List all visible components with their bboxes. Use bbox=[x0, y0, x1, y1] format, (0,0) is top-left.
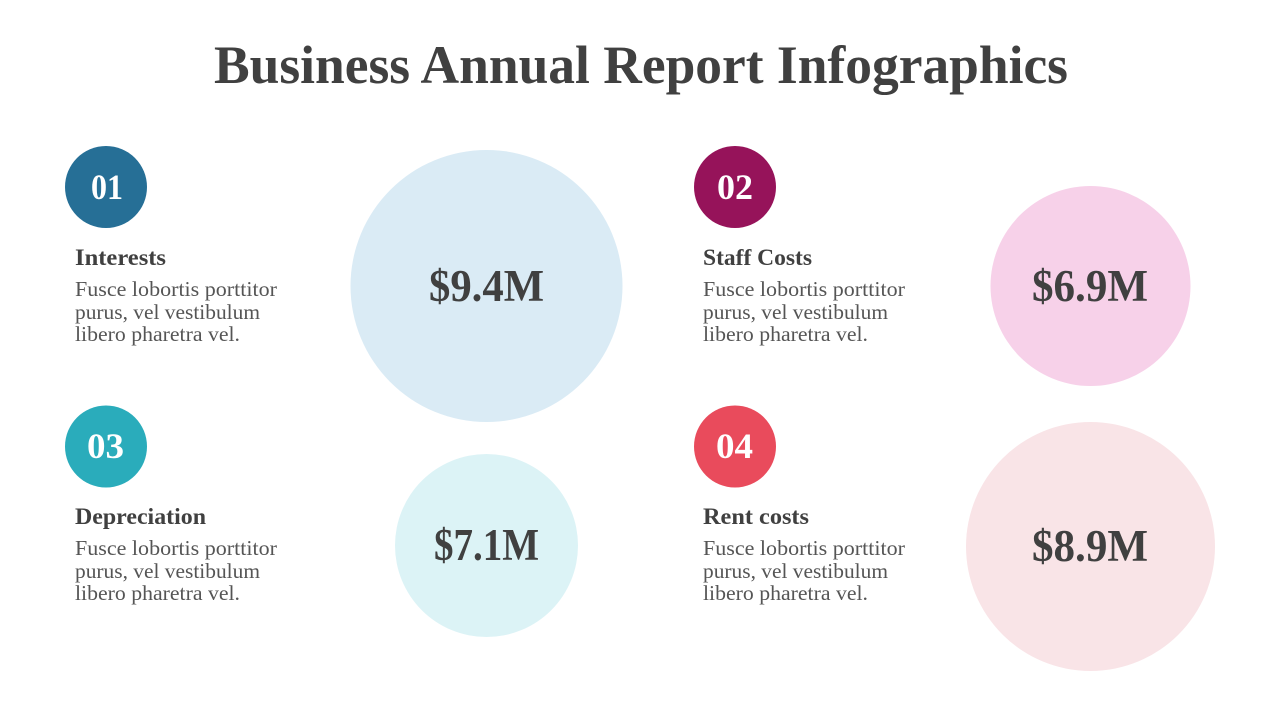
text block: interests description: Fusce lobortis porttitor bbox=[75, 277, 277, 301]
text block: staff costs description: libero pharetra vel. bbox=[703, 322, 868, 346]
heading: Interests: Interests bbox=[75, 245, 166, 270]
text block: staff costs description: Fusce lobortis porttitor bbox=[703, 277, 905, 301]
icon: number badge 02: 02 bbox=[717, 167, 753, 207]
text block: rent costs description: purus, vel vestibulum bbox=[703, 559, 888, 583]
heading: Depreciation: Depreciation bbox=[75, 504, 206, 529]
title: Business Annual Report Infographics bbox=[214, 35, 1068, 95]
icon: number badge 02 bbox=[694, 146, 776, 228]
value bubble: $9.4M bbox=[350, 150, 622, 422]
text block: staff costs description bbox=[703, 277, 905, 346]
icon: number badge 01 bbox=[65, 146, 147, 228]
text block: depreciation description: libero pharetra vel. bbox=[75, 581, 240, 605]
panel: staff costs bbox=[694, 146, 1190, 386]
heading: Rent costs: Rent costs bbox=[703, 504, 809, 529]
value bubble: $8.9M bbox=[966, 422, 1215, 671]
text block: interests description bbox=[75, 277, 277, 346]
panel: interests bbox=[65, 146, 622, 422]
heading: Staff Costs: Staff Costs bbox=[703, 245, 812, 270]
text block: depreciation description bbox=[75, 536, 277, 605]
text block: interests description: purus, vel vestibulum bbox=[75, 300, 260, 324]
text block: interests description: libero pharetra vel. bbox=[75, 322, 240, 346]
value bubble: $6.9M bbox=[990, 186, 1190, 386]
icon: number badge 03: 03 bbox=[87, 426, 124, 466]
text block: staff costs description: purus, vel vestibulum bbox=[703, 300, 888, 324]
text block: rent costs description: libero pharetra vel. bbox=[703, 581, 868, 605]
text block: depreciation description: Fusce lobortis porttitor bbox=[75, 536, 277, 560]
value bubble: $8.9M: $8.9M bbox=[1032, 521, 1148, 571]
text block: rent costs description bbox=[703, 536, 905, 605]
panel: depreciation bbox=[65, 406, 578, 637]
icon: number badge 04 bbox=[694, 406, 776, 488]
value bubble: $6.9M: $6.9M bbox=[1032, 261, 1148, 311]
text block: rent costs description: Fusce lobortis porttitor bbox=[703, 536, 905, 560]
value bubble: $9.4M: $9.4M bbox=[429, 261, 544, 311]
value bubble: $7.1M bbox=[395, 454, 578, 637]
panel: rent costs bbox=[694, 406, 1215, 671]
value bubble: $7.1M: $7.1M bbox=[434, 520, 539, 570]
text block: depreciation description: purus, vel vestibulum bbox=[75, 559, 260, 583]
icon: number badge 03 bbox=[65, 406, 147, 488]
icon: number badge 01: 01 bbox=[91, 167, 123, 207]
icon: number badge 04: 04 bbox=[716, 426, 753, 466]
